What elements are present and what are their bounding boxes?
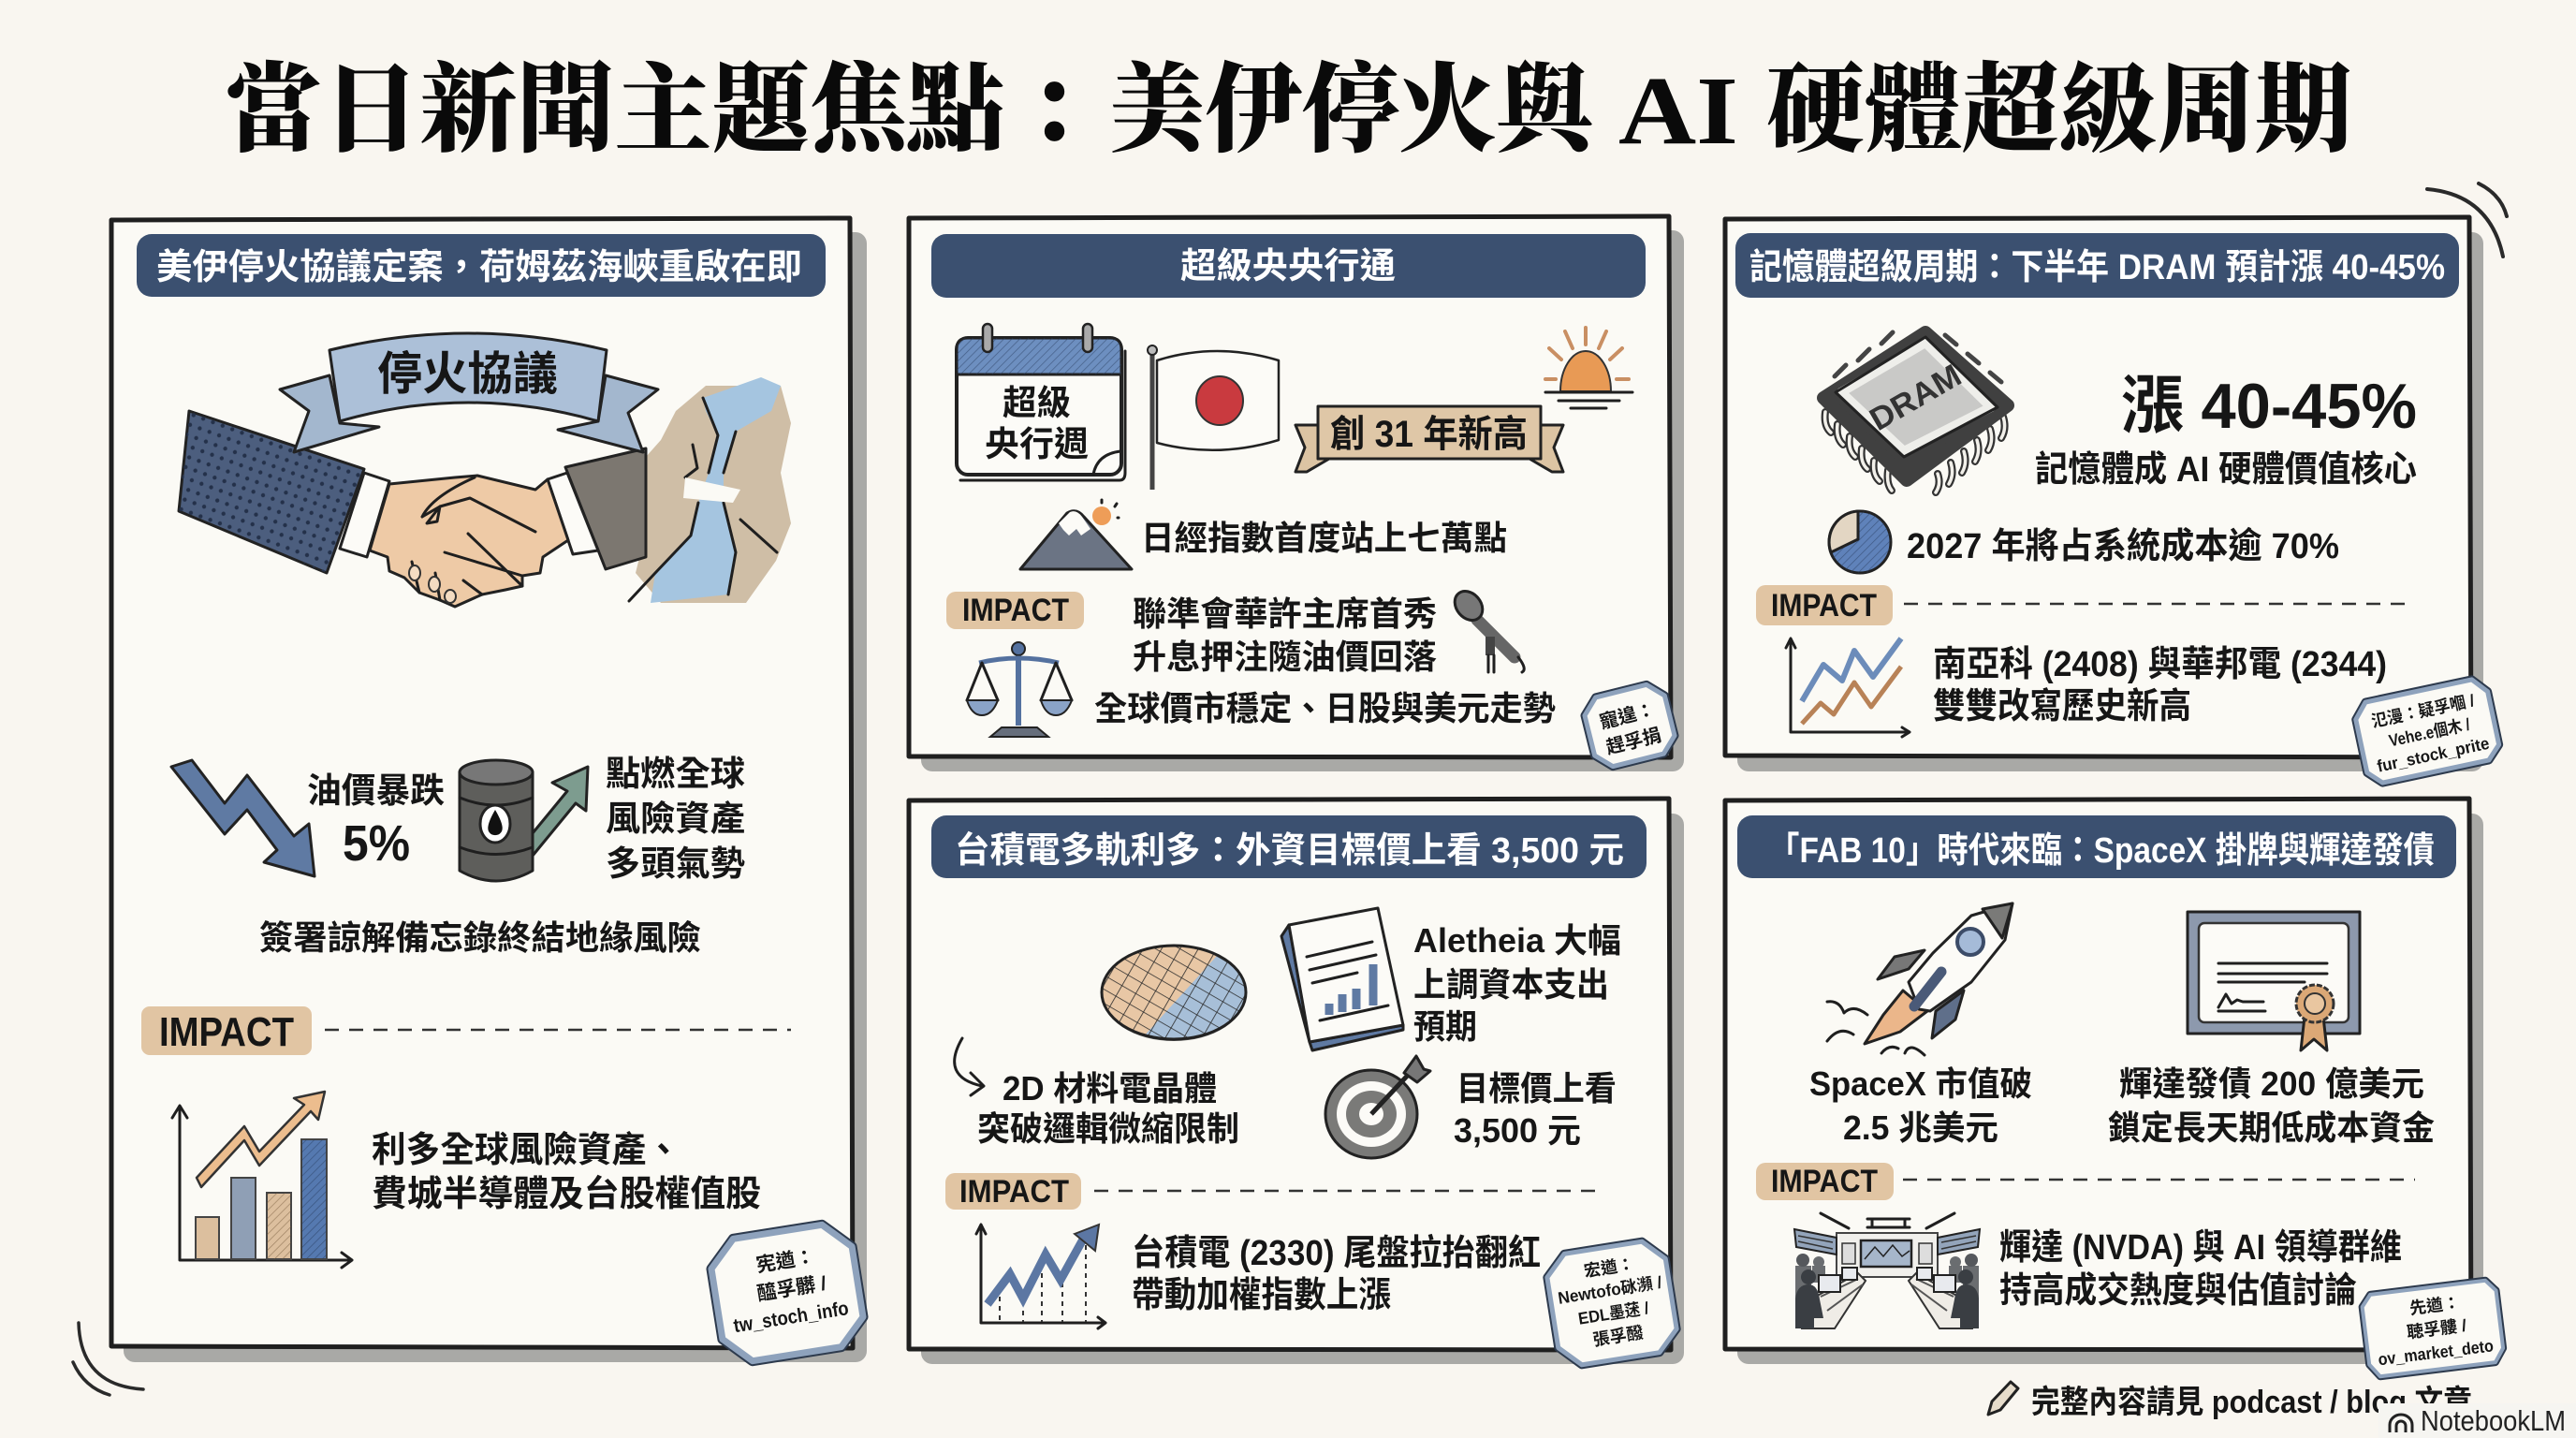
icon: trading room bbox=[1794, 1213, 1980, 1328]
text: risk asset rally: 點燃全球 bbox=[606, 755, 745, 793]
panel heading bbox=[931, 815, 1647, 878]
source stamp bbox=[2361, 1280, 2505, 1377]
panel heading bbox=[137, 234, 826, 297]
ribbon: 31-year high: 創 31 年新高 bbox=[1330, 414, 1528, 455]
source stamp bbox=[1544, 1239, 1680, 1368]
source stamp: Vehe.e個木 / bbox=[2387, 715, 2471, 750]
arrow: curved pointer bbox=[955, 1038, 984, 1095]
cuffs bbox=[340, 473, 598, 557]
ribbon banner with label: 停火協議 bbox=[377, 349, 558, 400]
source stamp: 醯孚髒 / bbox=[755, 1272, 828, 1305]
panel heading bbox=[931, 234, 1646, 298]
icon: oil barrel bbox=[460, 760, 533, 881]
clasped hands bbox=[370, 476, 568, 607]
title: 當日新聞主題焦點 bbox=[225, 57, 1004, 165]
text: memorandum: 簽署諒解備忘錄終結地緣風險 bbox=[259, 918, 701, 957]
icon: DRAM chip: DRAM bbox=[1864, 358, 1968, 438]
text: Aletheia capex: 預期 bbox=[1413, 1007, 1477, 1046]
title: 美伊停火與 bbox=[1108, 57, 1609, 165]
source stamp: tw_stoch_info bbox=[732, 1298, 850, 1337]
panel: ceasefire agreement bbox=[111, 218, 867, 1365]
panel card bbox=[909, 799, 1684, 1364]
panel card bbox=[111, 218, 867, 1362]
text: NVDA and AI leaders: 輝達 (NVDA) 與 AI 領導群維 bbox=[1999, 1228, 2402, 1268]
icon: up arrow bbox=[533, 767, 588, 856]
panel: FAB 10 era bbox=[1725, 799, 2505, 1377]
icon: calendar: 超級 bbox=[1003, 384, 1071, 422]
icon: analyst report bbox=[1281, 908, 1403, 1050]
source stamp: 趕孚捐 bbox=[1603, 725, 1663, 758]
decorative corner arcs: bottom left bbox=[73, 1323, 143, 1395]
panel heading bbox=[1737, 815, 2456, 878]
IMPACT tag: IMPACT bbox=[959, 1174, 1069, 1210]
ribbon banner with label bbox=[280, 333, 658, 452]
icon: DRAM chip bbox=[1823, 332, 2008, 492]
title: 硬體超級周期 bbox=[1766, 57, 2352, 165]
panel: TSMC bbox=[909, 799, 1684, 1368]
text: Fed chair bbox=[1133, 594, 1437, 676]
text: impact on assets: 利多全球風險資產、 bbox=[372, 1131, 681, 1170]
text: risk asset rally: 風險資產 bbox=[606, 800, 745, 838]
source stamp bbox=[708, 1221, 867, 1365]
source stamp: 先遒： bbox=[2408, 1293, 2461, 1318]
line chart icon bbox=[1786, 638, 1910, 737]
source stamp: 宏遒： bbox=[1583, 1254, 1635, 1281]
source stamp: 寵遑： bbox=[1597, 697, 1657, 733]
icon: pie chart bbox=[1829, 511, 1891, 573]
text: Nvidia bonds: 輝達發債 200 億美元 bbox=[2119, 1064, 2424, 1103]
source stamp: Newtofo砯瀕 / bbox=[1557, 1273, 1663, 1308]
source stamp: 張孚醱 bbox=[1591, 1322, 1645, 1350]
text: NVDA and AI leaders bbox=[1999, 1228, 2402, 1311]
text: SpaceX value: 2.5 兆美元 bbox=[1843, 1108, 1998, 1147]
panel card bbox=[1725, 799, 2483, 1364]
text: Aletheia capex: 上調資本支出 bbox=[1413, 965, 1609, 1004]
text: SpaceX value bbox=[1809, 1064, 2032, 1147]
text: Aletheia capex: Aletheia 大幅 bbox=[1413, 921, 1621, 960]
line chart icon bbox=[976, 1225, 1105, 1328]
decorative corner arcs: top right bbox=[2427, 183, 2507, 257]
text: risk asset rally bbox=[606, 755, 745, 883]
source stamp: fur_stock_prite bbox=[2376, 734, 2491, 776]
title: AI bbox=[1618, 57, 1738, 165]
text: Nanya and Winbond bbox=[1933, 645, 2387, 726]
source stamp: 氾漫：疑孚嗰 / bbox=[2370, 691, 2476, 731]
panel card bbox=[1725, 217, 2483, 771]
text: global markets: 全球價市穩定、日股與美元走勢 bbox=[1094, 689, 1556, 727]
text: DRAM price rise: 漲 40-45% bbox=[2121, 371, 2417, 442]
source stamp: ov_market_deto bbox=[2377, 1336, 2495, 1369]
footer note with pencil icon: 完整內容請見 podcast / blog 文章 bbox=[2031, 1385, 2472, 1420]
panel heading: 美伊停火協議定案，荷姆茲海峽重啟在即 bbox=[156, 248, 802, 287]
ribbon: 31-year high bbox=[1295, 406, 1563, 472]
source stamp: 宪遒： bbox=[754, 1245, 816, 1277]
text: impact on assets bbox=[372, 1131, 761, 1214]
title: : bbox=[1034, 29, 1076, 167]
text: DRAM price rise: 記憶體成 AI 硬體價值核心 bbox=[2035, 450, 2417, 490]
text: 2D transistor bbox=[977, 1069, 1239, 1148]
IMPACT tag: IMPACT bbox=[1771, 1164, 1878, 1199]
panel heading: 記憶體超級周期：下半年 DRAM 預計漲 40-45% bbox=[1749, 248, 2445, 287]
text: 2D transistor: 2D 材料電晶體 bbox=[1003, 1069, 1217, 1108]
text: Nanya and Winbond: 南亞科 (2408) 與華邦電 (2344) bbox=[1933, 645, 2387, 684]
icon: calendar: 央行週 bbox=[985, 425, 1089, 463]
source stamp bbox=[1581, 681, 1678, 770]
right sleeve bbox=[565, 448, 646, 569]
text: impact on assets: 費城半導體及台股權值股 bbox=[372, 1175, 761, 1214]
map of Hormuz strait bbox=[629, 377, 791, 603]
text: Fed chair: 升息押注隨油價回落 bbox=[1133, 638, 1437, 676]
icon: silicon wafer bbox=[1102, 946, 1254, 1049]
text: oil price drop bbox=[307, 771, 445, 872]
panel: super central bank week bbox=[909, 216, 1684, 771]
illustration: handshake with strait map bbox=[179, 377, 791, 607]
text: Nanya and Winbond: 雙雙改寫歷史新高 bbox=[1933, 687, 2191, 726]
panel heading: 「FAB 10」時代來臨：SpaceX 掛牌與輝達發債 bbox=[1768, 831, 2435, 871]
text: SpaceX value: SpaceX 市值破 bbox=[1809, 1064, 2032, 1103]
icon: Mt Fuji bbox=[1020, 500, 1132, 569]
source stamp bbox=[2352, 677, 2502, 785]
text: oil price drop: 油價暴跌 bbox=[307, 771, 445, 810]
icon: scales bbox=[967, 642, 1072, 737]
text: TSMC close: 帶動加權指數上漲 bbox=[1132, 1276, 1391, 1315]
icon: rising sun bbox=[1545, 328, 1632, 408]
text: TSMC close bbox=[1132, 1234, 1541, 1315]
icon: falling arrow bbox=[171, 760, 315, 876]
text: risk asset rally: 多頭氣勢 bbox=[606, 844, 745, 883]
source stamp: EDL墨蒁 / bbox=[1577, 1299, 1650, 1328]
icon: microphone bbox=[1449, 586, 1524, 672]
icon: target and arrow bbox=[1325, 1056, 1430, 1158]
icon: rocket bbox=[1827, 903, 2012, 1055]
IMPACT tag: IMPACT bbox=[1771, 588, 1877, 624]
icon: bond certificate bbox=[2188, 912, 2360, 1050]
text: NVDA and AI leaders: 持高成交熱度與估值討論 bbox=[1999, 1271, 2357, 1311]
left sleeve bbox=[179, 411, 364, 573]
text: Aletheia capex bbox=[1413, 921, 1621, 1046]
source stamp: 聴孚髏 / bbox=[2406, 1316, 2467, 1342]
IMPACT tag: IMPACT bbox=[159, 1009, 294, 1055]
text: Nvidia bonds bbox=[2108, 1064, 2435, 1147]
text: 2027 cost share: 2027 年將占系統成本逾 70% bbox=[1907, 527, 2339, 566]
panel heading: 超級央央行通 bbox=[1180, 247, 1396, 286]
panel heading: 台積電多軌利多：外資目標價上看 3,500 元 bbox=[955, 831, 1624, 871]
panel: memory supercycle bbox=[1725, 217, 2502, 785]
text: 2D transistor: 突破邏輯微縮限制 bbox=[977, 1109, 1239, 1148]
text: target price: 3,500 元 bbox=[1454, 1111, 1581, 1150]
bar chart with rising arrow bbox=[172, 1092, 352, 1268]
IMPACT tag: IMPACT bbox=[962, 593, 1069, 628]
text: target price bbox=[1454, 1069, 1617, 1150]
title bbox=[225, 29, 2352, 167]
panel card bbox=[909, 216, 1684, 771]
icon: Japanese flag bbox=[1148, 345, 1279, 490]
text: Nvidia bonds: 鎖定長天期低成本資金 bbox=[2108, 1108, 2435, 1147]
text: DRAM price rise bbox=[2035, 371, 2417, 490]
text: Fed chair: 聯準會華許主席首秀 bbox=[1133, 594, 1437, 633]
icon: calendar bbox=[957, 324, 1125, 480]
text: target price: 目標價上看 bbox=[1456, 1069, 1617, 1108]
text: TSMC close: 台積電 (2330) 尾盤拉抬翻紅 bbox=[1132, 1234, 1541, 1273]
panel heading bbox=[1735, 233, 2459, 298]
text: Nikkei: 日經指數首度站上七萬點 bbox=[1141, 519, 1507, 557]
text: oil price drop: 5% bbox=[343, 815, 410, 872]
